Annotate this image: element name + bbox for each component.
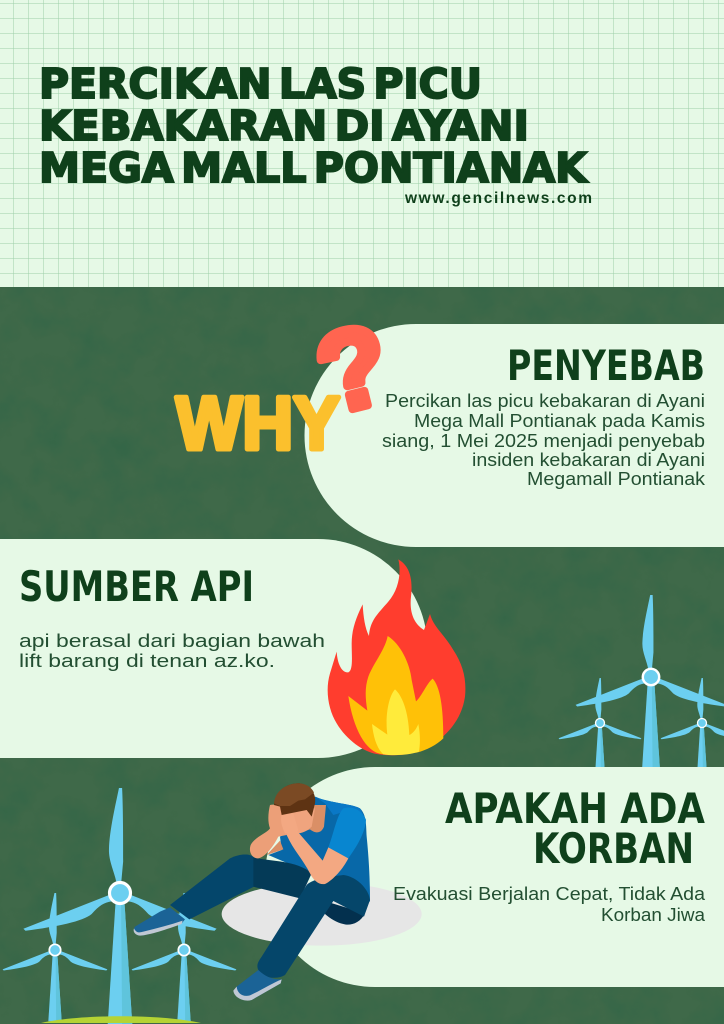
text block: penyebab [382,391,706,489]
panel: korban [265,767,724,987]
text block: korban: Evakuasi Berjalan Cepat, Tidak Ada [393,884,706,904]
illustration: sad man [134,783,422,1001]
text block: penyebab: insiden kebakaran di Ayani [472,450,705,470]
panel: sumber api [0,539,428,758]
icon: flame [328,559,465,755]
text block: penyebab: Percikan las picu kebakaran di Ayani [385,391,705,411]
text block: penyebab: siang, 1 Mei 2025 menjadi penyebab [382,431,705,451]
icon: why question: WHY [176,381,340,465]
title: KEBAKARAN DI AYANI [39,102,529,150]
wind turbines right [559,595,724,780]
icon: why question: ? [304,299,402,438]
heading: korban [445,784,705,873]
wind turbines left [3,788,236,1024]
title: PERCIKAN LAS PICU [39,60,482,108]
text block: sumber api: api berasal dari bagian bawah [19,631,325,651]
text block: penyebab: Megamall Pontianak [527,469,706,489]
text block: sumber api [19,631,325,671]
dark green paper background [0,287,724,1024]
heading: sumber api: SUMBER API [19,562,254,611]
ground [41,1016,201,1023]
text block: penyebab: Mega Mall Pontianak pada Kamis [414,411,705,431]
header background with grid [0,0,724,287]
title: MEGA MALL PONTIANAK [39,144,589,192]
text block: korban [393,884,706,925]
website url: www.gencilnews.com [404,190,592,207]
icon: why question [176,299,402,465]
text block: sumber api: lift barang di tenan az.ko. [19,651,275,671]
text block: korban: Korban Jiwa [601,905,706,925]
title [39,60,589,192]
panel: penyebab [304,324,724,547]
